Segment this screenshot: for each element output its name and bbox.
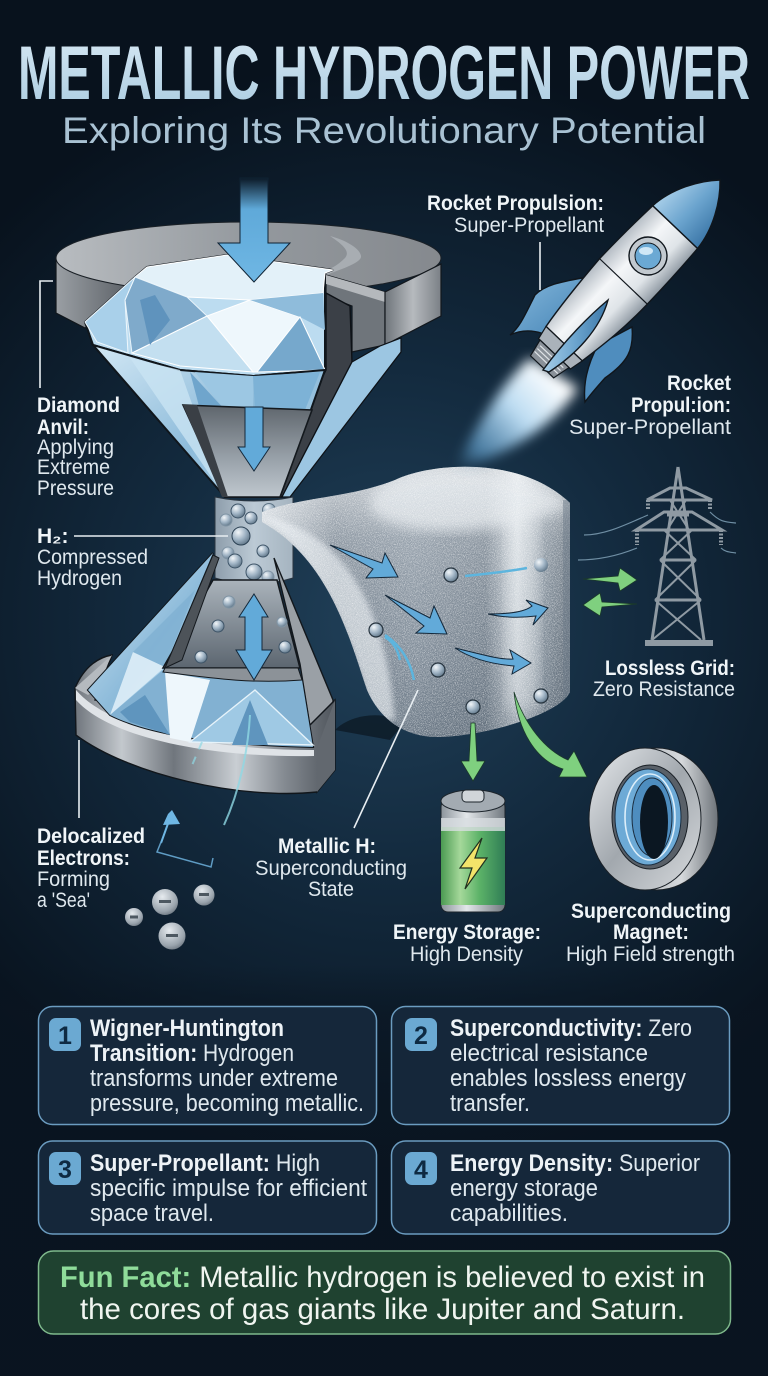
label: superconducting magnet: Superconducting — [571, 900, 731, 923]
panel 2 text: enables lossless energy — [450, 1065, 686, 1092]
fun fact text: Fun Fact: Metallic hydrogen is believed to exist in — [60, 1261, 705, 1294]
label: diamond anvil: Diamond — [37, 394, 120, 417]
upper diamond crown — [85, 255, 333, 376]
inner pressure arrow — [238, 407, 270, 471]
double-headed arrow — [236, 594, 272, 680]
lower diamond — [88, 553, 313, 747]
label: rocket propulsion top — [427, 192, 604, 237]
center fin — [543, 300, 608, 372]
panel 3 text — [90, 1150, 367, 1227]
metallic hydrogen mass — [262, 466, 570, 740]
label: lossless grid: Zero Resistance — [593, 678, 735, 701]
label: rocket propulsion right: Super-Propellant — [569, 416, 731, 439]
battery — [441, 790, 505, 912]
panel 3 — [38, 1141, 376, 1234]
fun fact text — [60, 1261, 705, 1326]
label: diamond anvil: Anvil: — [37, 416, 89, 439]
label: metallic H: State — [308, 878, 354, 901]
panel 1 text: pressure, becoming metallic. — [90, 1090, 364, 1117]
superconducting magnet — [589, 748, 718, 890]
badge 4: 4 — [414, 1156, 428, 1184]
label: lossless grid: Lossless Grid: — [605, 657, 735, 680]
upper inner window — [183, 405, 312, 497]
badge 2: 2 — [414, 1022, 428, 1050]
porthole — [629, 237, 667, 275]
panel 2 text — [450, 1015, 692, 1117]
label: superconducting magnet: High Field strength — [566, 943, 735, 966]
leader lines — [40, 242, 540, 828]
blue flow arrows — [330, 545, 548, 674]
rocket — [510, 157, 744, 402]
electron trails — [190, 715, 250, 825]
label: energy storage: High Density — [410, 943, 523, 966]
label: H2: Compressed — [37, 546, 148, 569]
power tower — [578, 467, 736, 646]
label: rocket propulsion right — [569, 372, 731, 439]
label: energy storage — [393, 921, 541, 966]
rear fin left — [510, 278, 590, 340]
label: delocalized electrons: Forming — [37, 868, 110, 891]
upper right dark cone wall — [262, 293, 352, 497]
label: metallic H: Superconducting — [255, 857, 407, 880]
label: delocalized electrons: a 'Sea' — [37, 889, 90, 912]
panel 4 text: energy storage — [450, 1175, 598, 1202]
lower inner window — [163, 580, 300, 668]
rocket body — [518, 157, 744, 390]
panel 2 text: transfer. — [450, 1090, 530, 1117]
fun fact text: the cores of gas giants like Jupiter and Saturn. — [80, 1293, 685, 1326]
panel 1 text: Transition: Hydrogen — [90, 1040, 294, 1067]
label: delocalized electrons: Electrons: — [37, 847, 130, 870]
panel 2 text: electrical resistance — [450, 1040, 648, 1067]
panel 4 — [392, 1141, 730, 1234]
spheres in metal — [369, 558, 548, 714]
top pressure arrow — [218, 178, 290, 282]
label: rocket propulsion top: Super-Propellant — [454, 214, 604, 237]
bottom section background — [0, 965, 768, 1376]
lower bubbles — [195, 596, 291, 663]
electron bracket and arrow — [157, 810, 213, 867]
label: H2: H₂: — [37, 525, 68, 548]
label: delocalized electrons: Delocalized — [37, 825, 145, 848]
label: superconducting magnet — [566, 900, 735, 966]
green arrows — [461, 568, 637, 781]
lower metal base — [75, 655, 335, 793]
label: diamond anvil: Pressure — [37, 477, 114, 500]
panel 2 — [392, 1006, 730, 1124]
top metal plate — [56, 222, 441, 352]
badge 1: 1 — [58, 1022, 72, 1050]
panel 3 text: Super-Propellant: High — [90, 1150, 320, 1177]
panel 1 text: transforms under extreme — [90, 1065, 338, 1092]
panel 1 — [38, 1006, 376, 1124]
illustration: diamond anvil cell — [56, 178, 441, 825]
lower window band — [163, 668, 302, 681]
label: metallic H: Metallic H: — [278, 835, 376, 858]
left dark wall — [165, 555, 219, 668]
panel 2 text: Superconductivity: Zero — [450, 1015, 692, 1042]
label: H2 — [37, 525, 148, 590]
lower right post — [274, 558, 333, 792]
label: diamond anvil: Applying — [37, 436, 114, 459]
label: H2: Hydrogen — [37, 567, 122, 590]
label: rocket propulsion top: Rocket Propulsion: — [427, 192, 604, 215]
label: rocket propulsion right: Propul:ion: — [631, 394, 731, 417]
label: diamond anvil: Extreme — [37, 456, 110, 479]
label: delocalized electrons — [37, 825, 145, 912]
panel 4 text: capabilities. — [450, 1200, 568, 1227]
label: metallic H — [255, 835, 407, 901]
cyan electron streaks — [385, 568, 527, 680]
label: diamond anvil — [37, 394, 120, 500]
badge 1 — [49, 1018, 81, 1051]
rocket exhaust flame — [455, 358, 578, 468]
upper diamond pavilion — [93, 345, 325, 497]
panel 3 text: space travel. — [90, 1200, 214, 1227]
badge 2 — [405, 1018, 437, 1051]
panel 1 text: Wigner-Huntington — [90, 1015, 284, 1042]
label: energy storage: Energy Storage: — [393, 921, 541, 944]
panel 3 text: specific impulse for efficient — [90, 1175, 367, 1202]
label: rocket propulsion right: Rocket — [667, 372, 731, 395]
electrons — [125, 884, 214, 950]
rear fin right — [585, 327, 632, 402]
compressed hydrogen column — [215, 497, 293, 584]
fun fact panel — [38, 1251, 730, 1334]
upper right diamond sliver — [282, 338, 401, 497]
badge 3 — [49, 1152, 81, 1185]
label: superconducting magnet: Magnet: — [613, 921, 689, 944]
panel 4 text: Energy Density: Superior — [450, 1150, 700, 1177]
badge 3: 3 — [58, 1156, 72, 1184]
badge 4 — [405, 1152, 437, 1185]
panel 4 text — [450, 1150, 700, 1227]
subtitle: Exploring Its Revolutionary Potential — [62, 110, 706, 151]
label: lossless grid — [593, 657, 735, 701]
panel 1 text — [90, 1015, 364, 1117]
